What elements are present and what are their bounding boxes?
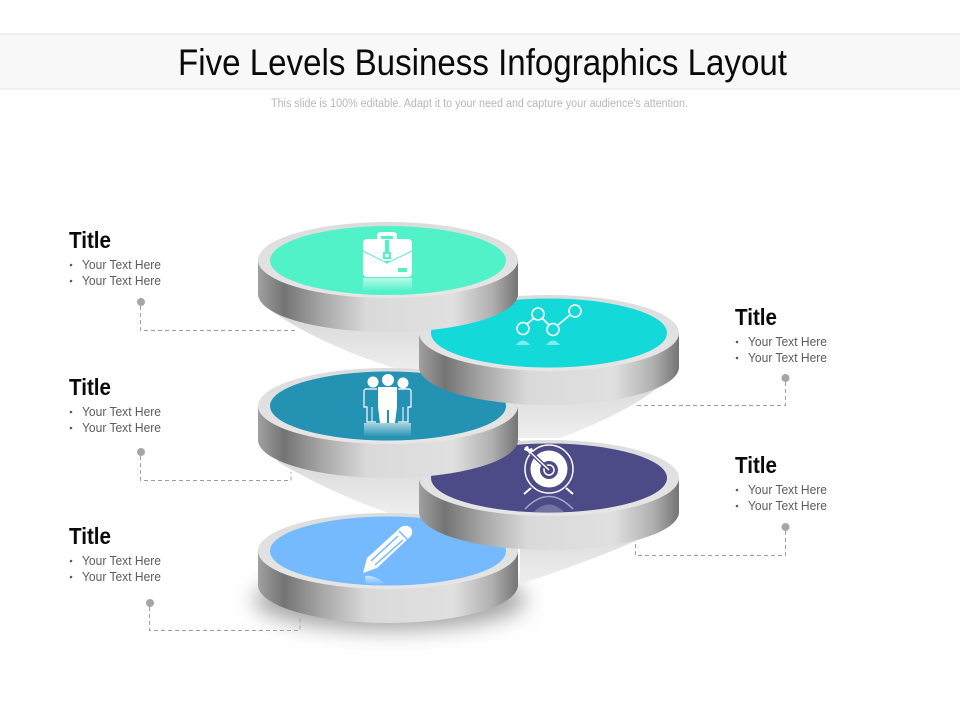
subtitle: This slide is 100% editable. Adapt it to your need and capture your audience's attention. — [271, 98, 688, 110]
funnel shadows between levels — [270, 300, 665, 584]
text block: level 3: Title — [69, 374, 111, 400]
text block: level 5: Title — [69, 523, 111, 549]
text block: level 2: Your Text Here — [748, 351, 827, 365]
connector: level 1 — [137, 298, 296, 330]
text block: level 2 — [735, 304, 827, 365]
text block: level 1 — [69, 227, 161, 288]
text block: level 2: Title — [735, 304, 777, 330]
text block: level 4 — [735, 452, 827, 513]
icon: pencil — [363, 526, 412, 585]
icon: briefcase — [363, 232, 412, 291]
icon: line chart — [516, 305, 581, 345]
header band — [0, 33, 960, 90]
connector: level 5 — [146, 599, 300, 630]
text block: level 5: Your Text Here — [82, 554, 161, 568]
base shadow — [254, 570, 526, 630]
text block: level 3: Your Text Here — [82, 421, 161, 435]
text block: level 3: Your Text Here — [82, 405, 161, 419]
connector: level 2 — [636, 374, 790, 406]
text block: level 4: Your Text Here — [748, 483, 827, 497]
icon: target — [524, 445, 573, 512]
text block: level 5 — [69, 523, 161, 584]
text block: level 3 — [69, 374, 161, 435]
panel: level 5 disc — [258, 513, 518, 623]
text block: level 2: Your Text Here — [748, 335, 827, 349]
title: Five Levels Business Infographics Layout — [178, 42, 788, 83]
text block: level 4: Your Text Here — [748, 499, 827, 513]
text block: level 4: Title — [735, 452, 777, 478]
text block: level 1: Title — [69, 227, 111, 253]
panel: level 1 disc — [258, 222, 518, 332]
text block: level 5: Your Text Here — [82, 570, 161, 584]
panel: level 3 disc — [258, 368, 518, 478]
connector: level 4 — [636, 523, 790, 556]
icon: people — [364, 374, 411, 437]
connector: level 3 — [137, 448, 291, 480]
text block: level 1: Your Text Here — [82, 274, 161, 288]
panel: level 4 disc — [419, 440, 679, 550]
text block: level 1: Your Text Here — [82, 258, 161, 272]
panel: level 2 disc — [419, 295, 679, 405]
